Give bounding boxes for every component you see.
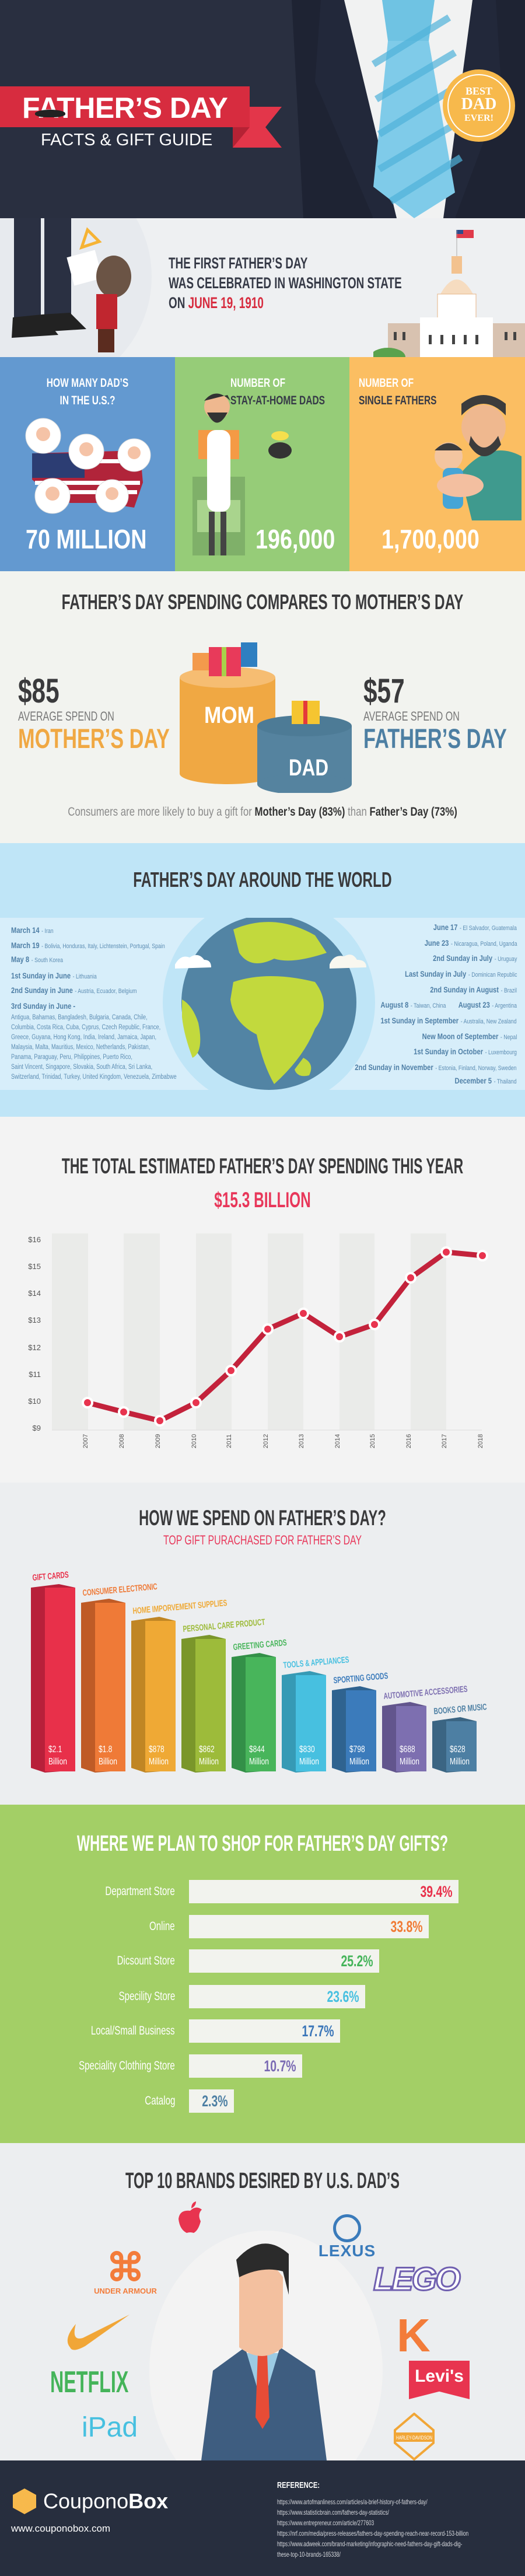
first father's day section: [0, 218, 525, 357]
icon: moustache: [35, 110, 65, 117]
3d bar chart: Million: [199, 1756, 219, 1766]
list: left dates: 1st Sunday in June - Lithuania: [11, 971, 97, 980]
bar: specility store: 23.6%: [327, 1988, 359, 2005]
bar: speciality clothing: 10.7%: [264, 2057, 296, 2075]
line chart: [28, 1233, 488, 1448]
list: right dates: 2nd Sunday in August - Brazil: [430, 985, 517, 994]
bar: discount store: Dicsount Store: [117, 1954, 175, 1967]
logo: nike: [68, 2315, 130, 2350]
section: total spending line chart: [0, 1117, 525, 1483]
list: right dates: 2nd Sunday in July - Uruguay: [433, 953, 517, 963]
section: around the world: [0, 843, 525, 1117]
list: right dates: 1st Sunday in October - Luxembourg: [414, 1047, 517, 1056]
text: mother's day spend: [18, 672, 170, 754]
list: right dates: August 8 - Taiwan, China August 23 - Argentina: [380, 1000, 517, 1009]
list: right dates: [355, 922, 517, 1085]
bar: specility store: Specility Store: [118, 1990, 175, 2003]
list: right dates: June 17 - El Salvador, Guatemala: [433, 922, 517, 932]
list: right dates: December 5 - Thailand: [455, 1076, 517, 1085]
logo: levi's: Levi's: [415, 2367, 464, 2386]
heading: HOW MANY DAD’S: [47, 376, 128, 390]
chart: mom and dad podium: [180, 642, 352, 793]
bar: department store: [106, 1880, 459, 1903]
footer: these-top-10-brands-165338/: [277, 2550, 341, 2558]
text: father's day spend: [363, 672, 507, 754]
list: right dates: June 23 - Nicaragua, Poland, Uganda: [424, 938, 517, 948]
3d bar chart: [31, 1570, 487, 1773]
text: consumer likelihood: Consumers are more likely to buy a gift for Mother’s Day (83%) than Father’s Day (73%): [68, 805, 457, 819]
logo: levi's: [409, 2361, 470, 2399]
3d bar chart: GREETING CARDS: [233, 1637, 288, 1652]
logo: under armour: [94, 2246, 157, 2295]
line chart: $12: [28, 1343, 41, 1352]
text: mother's day spend: $85: [18, 672, 60, 710]
bar: discount store: [117, 1949, 379, 1973]
list: left dates: Panama, Paraguay, Peru, Philippines, Puerto Rico,: [11, 1054, 132, 1061]
panel: single fathers: [349, 357, 525, 571]
bar: catalog: Catalog: [145, 2094, 175, 2107]
logo: kohls k: K: [397, 2309, 430, 2361]
section: top brands: [0, 2143, 525, 2460]
header section: [0, 0, 525, 218]
line chart: $14: [28, 1289, 41, 1298]
3d bar chart: Million: [249, 1756, 269, 1766]
3d bar chart: $2.1: [48, 1743, 62, 1754]
logo: under armour: ⌘: [106, 2246, 145, 2289]
3d bar chart: $628: [450, 1743, 466, 1754]
footer: https://www.entrepreneur.com/article/277603: [277, 2519, 374, 2527]
3d bar chart: CONSUMER ELECTRONIC: [82, 1581, 158, 1598]
footer: https://nrf.com/media/press-releases/fathers-day-spending-reach-near-record-153-billion: [277, 2529, 468, 2537]
3d bar chart: $844: [249, 1743, 265, 1754]
line chart: $16: [28, 1235, 41, 1244]
logo: harley-davidson: [393, 2413, 436, 2460]
list: left dates: Saint Vincent, Singapore, Slovakia, South Africa, Sri Lanka,: [11, 1064, 152, 1071]
badge: best dad ever: BEST: [466, 85, 492, 97]
illustration: US map with dads: [26, 418, 150, 513]
panel: dads in US: [0, 357, 175, 571]
list: left dates: Malaysia, Malta, Mauritius, Mexico, Netherlands, Pakistan,: [11, 1044, 150, 1051]
heading: THE TOTAL ESTIMATED FATHER’S DAY SPENDING THIS YEAR: [62, 1154, 463, 1178]
3d bar chart: Million: [400, 1756, 419, 1766]
3d bar chart: SPORTING GOODS: [333, 1670, 388, 1685]
3d bar chart: TOOLS & APPLIANCES: [283, 1654, 349, 1670]
section: spending compare: [0, 571, 525, 843]
illustration: capitol building: [373, 230, 525, 357]
subtitle: 15.3 billion: $15.3 BILLION: [214, 1188, 311, 1212]
bar: online: [149, 1915, 429, 1938]
logo: couponobox: CouponoBox: [43, 2489, 168, 2513]
bar: specility store: [118, 1985, 365, 2008]
heading: TOP 10 BRANDS DESIRED BY U.S. DAD’S: [125, 2169, 400, 2193]
list: left dates: March 14 - Iran: [11, 925, 54, 935]
line chart: $13: [28, 1316, 41, 1324]
illustration: father holding child: [435, 395, 522, 520]
footer: https://www.artofmanliness.com/articles/a-brief-history-of-fathers-day/: [277, 2498, 428, 2506]
3d bar chart: Million: [349, 1756, 369, 1766]
references: REFERENCE:: [277, 2480, 320, 2490]
heading: STAY-AT-HOME DADS: [230, 394, 325, 407]
text: father's day spend: AVERAGE SPEND ON: [363, 709, 460, 723]
text: father's day spend: $57: [363, 672, 405, 710]
heading: [230, 376, 325, 407]
illustration: dad legs and child with gift: [12, 218, 131, 352]
text: first father's day: THE FIRST FATHER’S DAY: [169, 254, 307, 272]
bar: catalog: 2.3%: [202, 2092, 228, 2110]
bar: online: 33.8%: [391, 1918, 423, 1935]
badge: best dad ever: DAD: [461, 95, 496, 113]
text: mother's day spend: AVERAGE SPEND ON: [18, 709, 114, 723]
heading: [359, 376, 437, 407]
bar: local small business: 17.7%: [302, 2022, 334, 2040]
bar: discount store: 25.2%: [341, 1952, 373, 1970]
illustration: man in suit: [201, 2243, 327, 2460]
illustration: suit and tie: [292, 0, 525, 218]
bar: speciality clothing: [79, 2054, 302, 2078]
heading: [47, 376, 128, 407]
logo: lexus: LEXUS: [318, 2242, 376, 2260]
subtitle: TOP GIFT PURACHASED FOR FATHER’S DAY: [163, 1533, 362, 1547]
list: left dates: March 19 - Bolivia, Honduras, Italy, Lichtenstein, Portugal, Spain: [11, 941, 165, 950]
logo: apple: [178, 2201, 202, 2233]
line chart: 2018: [477, 1434, 484, 1448]
number: 70 million: 70 MILLION: [26, 524, 146, 554]
list: left dates: 3rd Sunday in June -: [11, 1001, 75, 1011]
3d bar chart: Million: [450, 1756, 470, 1766]
3d bar chart: Million: [299, 1756, 319, 1766]
list: left dates: May 8 - South Korea: [11, 955, 63, 964]
line chart: 2013: [298, 1434, 305, 1448]
3d bar chart: PERSONAL CARE PRODUCT: [183, 1617, 265, 1634]
list: right dates: 1st Sunday in September - Australia, New Zealand: [381, 1016, 517, 1025]
panel: stay-at-home dads: [175, 357, 349, 571]
badge: best dad ever: [443, 69, 515, 142]
number: 1,700,000: 1,700,000: [382, 524, 480, 554]
line chart: 2007: [82, 1434, 89, 1448]
number: 196,000: 196,000: [256, 524, 335, 554]
3d bar chart: Million: [149, 1756, 169, 1766]
3d bar chart: HOME IMPORVEMENT SUPPLIES: [132, 1598, 228, 1616]
list: left dates: [11, 925, 177, 1081]
heading: SINGLE FATHERS: [359, 394, 437, 407]
list: right dates: Last Sunday in July - Dominican Republic: [405, 969, 517, 978]
bar: local small business: [91, 2019, 340, 2043]
bar: department store: Department Store: [106, 1885, 175, 1898]
line chart: 2014: [334, 1434, 341, 1448]
logo: lexus: [318, 2214, 376, 2260]
title ribbon: FACTS & GIFT GUIDE: [41, 131, 212, 149]
text: website: www.couponobox.com: [11, 2523, 110, 2534]
heading: FATHER’S DAY SPENDING COMPARES TO MOTHER’S DAY: [62, 590, 463, 614]
line chart: 2015: [369, 1434, 376, 1448]
bar: catalog: [145, 2089, 234, 2113]
heading: HOW WE SPEND ON FATHER’S DAY?: [139, 1506, 386, 1530]
section: where we shop: [0, 1805, 525, 2143]
text: first father's day: WAS CELEBRATED IN WASHINGTON STATE: [169, 274, 402, 292]
line chart: 2010: [191, 1434, 198, 1448]
line chart: 2016: [405, 1434, 412, 1448]
bar: speciality clothing: Speciality Clothing Store: [79, 2059, 175, 2072]
line chart: $9: [33, 1424, 41, 1432]
3d bar chart: AUTOMOTIVE ACCESSORIES: [383, 1683, 468, 1701]
title ribbon: FATHER’S DAY: [22, 92, 228, 124]
chart: mom and dad podium: MOM: [204, 702, 254, 728]
logo: ipad: iPad: [82, 2412, 138, 2443]
logo: lego: LEGO: [373, 2260, 459, 2297]
list: left dates: Greece, Guyana, Hong Kong, India, Ireland, Jamaica, Japan,: [11, 1034, 156, 1041]
3d bar chart: $878: [149, 1743, 164, 1754]
illustration: cooking dad: [192, 393, 292, 555]
text: first father's day: [169, 254, 402, 312]
heading: WHERE WE PLAN TO SHOP FOR FATHER’S DAY GIFTS?: [77, 1831, 448, 1856]
text: first father's day: ON JUNE 19, 1910: [169, 294, 264, 312]
line chart: 2011: [226, 1434, 233, 1448]
bar: local small business: Local/Small Business: [91, 2024, 175, 2037]
list: right dates: 2nd Sunday in November - Estonia, Finland, Norway, Sweden: [355, 1062, 517, 1072]
list: left dates: Antigua, Bahamas, Bangladesh, Bulgaria, Canada, Chile,: [11, 1014, 148, 1021]
line chart: 2009: [155, 1434, 162, 1448]
text: father's day spend: FATHER’S DAY: [363, 723, 507, 754]
section: how we spend: [0, 1483, 525, 1805]
line chart: $15: [28, 1262, 41, 1271]
footer: https://www.statisticbrain.com/fathers-day-statistics/: [277, 2508, 389, 2516]
3d bar chart: $830: [299, 1743, 315, 1754]
3d bar chart: $1.8: [99, 1743, 112, 1754]
3d bar chart: BOOKS OR MUSIC: [433, 1701, 487, 1716]
line chart: $10: [28, 1397, 41, 1406]
3d bar chart: Billion: [99, 1756, 117, 1766]
heading: NUMBER OF: [359, 376, 414, 390]
3d bar chart: $862: [199, 1743, 215, 1754]
list: left dates: Columbia, Costa Rica, Cuba, Cyprus, Czech Republic, France,: [11, 1024, 160, 1031]
3d bar chart: $688: [400, 1743, 415, 1754]
illustration: globe: [163, 918, 375, 1090]
list: left dates: Switzerland, Trinidad, Turkey, United Kingdom, Venezuela, Zimbabwe: [11, 1074, 177, 1081]
3d bar chart: GIFT CARDS: [32, 1570, 69, 1582]
chart: mom and dad podium: DAD: [289, 755, 328, 781]
title ribbon: [0, 86, 282, 149]
footer: [0, 2460, 525, 2576]
heading: FATHER’S DAY AROUND THE WORLD: [133, 868, 392, 892]
line chart: 2017: [441, 1434, 448, 1448]
logo: under armour: UNDER ARMOUR: [94, 2287, 157, 2295]
list: left dates: 2nd Sunday in June - Austria, Ecuador, Belgium: [11, 985, 137, 995]
heading: IN THE U.S.?: [60, 394, 115, 407]
3d bar chart: Billion: [48, 1756, 67, 1766]
badge: best dad ever: EVER!: [464, 113, 494, 123]
footer: https://www.adweek.com/brand-marketing/infographic-need-fathers-day-gift-dads-dig-: [277, 2540, 462, 2548]
bar: department store: 39.4%: [421, 1883, 453, 1900]
heading: NUMBER OF: [230, 376, 285, 390]
text: mother's day spend: MOTHER’S DAY: [18, 723, 170, 754]
line chart: $11: [29, 1370, 41, 1379]
line chart: 2012: [262, 1434, 270, 1448]
bar: online: Online: [149, 1920, 175, 1933]
line chart: 2008: [118, 1434, 125, 1448]
logo: netflix: NETFLIX: [50, 2365, 128, 2399]
3d bar chart: $798: [349, 1743, 365, 1754]
list: right dates: New Moon of September - Nepal: [422, 1032, 517, 1041]
